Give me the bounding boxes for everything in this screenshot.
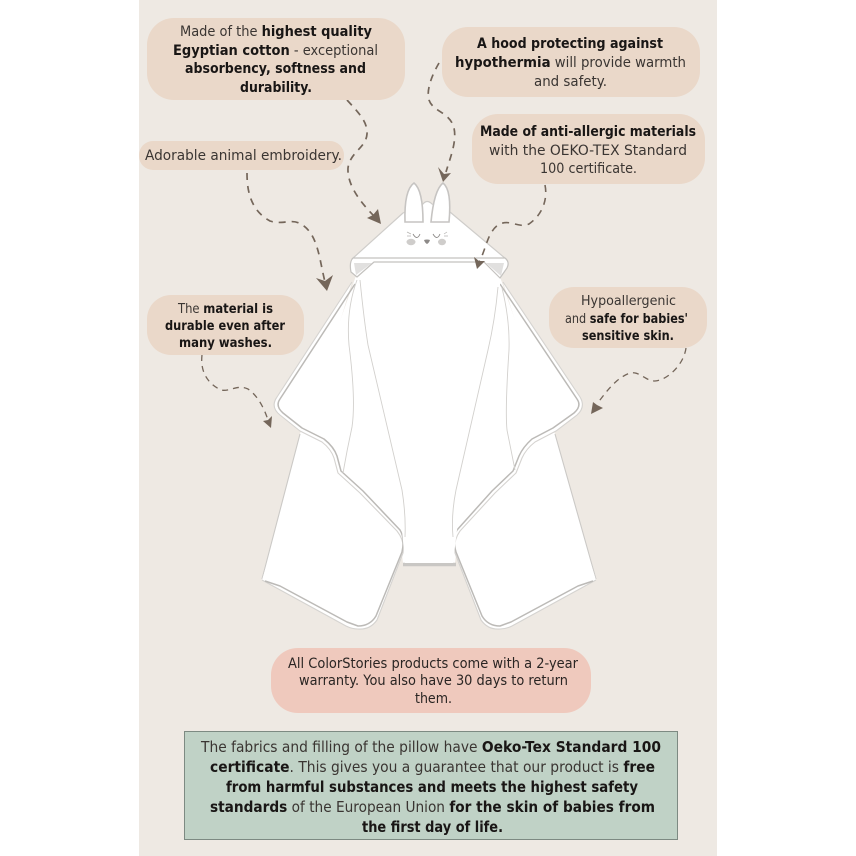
callout: anti-allergic: Made of anti-allergic materials bbox=[480, 124, 696, 140]
hood collar bbox=[350, 258, 508, 278]
callout: anti-allergic: 100 certificate. bbox=[540, 161, 637, 177]
callout: material durability: durable even after bbox=[165, 318, 285, 334]
callout: hood bbox=[442, 27, 700, 97]
callout: warranty bbox=[271, 648, 591, 713]
bunny face bbox=[406, 232, 448, 245]
callout: material durability: The material is bbox=[177, 301, 273, 317]
callout: warranty: them. bbox=[415, 691, 452, 707]
towel back side edges bbox=[262, 434, 596, 579]
callout: Egyptian cotton: Made of the highest quality bbox=[180, 24, 372, 40]
callout: material durability: many washes. bbox=[179, 335, 272, 351]
background panel bbox=[139, 0, 717, 856]
towel fold lines bbox=[343, 280, 515, 537]
callout: Egyptian cotton bbox=[147, 18, 405, 100]
certificate box: The fabrics and filling of the pillow have Oeko-Tex Standard 100 bbox=[200, 738, 661, 756]
callout: hypoallergenic bbox=[549, 287, 707, 348]
hood bbox=[352, 202, 506, 259]
callout: anti-allergic: with the OEKO-TEX Standard bbox=[489, 143, 687, 159]
callout: hypoallergenic: and safe for babies' bbox=[565, 311, 688, 327]
certificate box: standards of the European Union for the skin of babies from bbox=[210, 798, 655, 816]
callout: Egyptian cotton: absorbency, softness and bbox=[185, 61, 366, 77]
callout: warranty: All ColorStories products come with a 2-year bbox=[288, 656, 578, 672]
arrow: cotton to hood bbox=[347, 100, 381, 224]
callout: hood: and safety. bbox=[534, 74, 607, 90]
arrow: hypoallergenic bbox=[591, 348, 686, 414]
callout: Egyptian cotton: Egyptian cotton - exceptional bbox=[173, 43, 378, 59]
callout: hypoallergenic: sensitive skin. bbox=[582, 328, 674, 344]
callout: Egyptian cotton: durability. bbox=[240, 80, 312, 96]
right flap bbox=[455, 282, 596, 629]
certificate box bbox=[184, 732, 678, 840]
callout: embroidery bbox=[139, 141, 344, 170]
arrow: material bbox=[202, 355, 272, 428]
arrow: embroidery bbox=[247, 173, 333, 291]
callout: warranty: warranty. You also have 30 days to return bbox=[299, 673, 568, 689]
hood inner shadows bbox=[354, 263, 504, 276]
left flap bbox=[262, 282, 403, 629]
certificate box: from harmful substances and meets the highest safety bbox=[226, 778, 638, 796]
callout: hood: hypothermia will provide warmth bbox=[455, 55, 686, 71]
arrow: anti-allergic bbox=[474, 185, 546, 269]
callout: hypoallergenic: Hypoallergenic bbox=[581, 293, 676, 309]
arrow: hood protection bbox=[428, 63, 455, 182]
callout: anti-allergic bbox=[472, 114, 705, 184]
centre panel bbox=[358, 262, 500, 563]
towel illustration bbox=[262, 183, 596, 629]
towel back panels bbox=[262, 273, 596, 626]
certificate box: the first day of life. bbox=[362, 818, 503, 836]
callout: embroidery: Adorable animal embroidery. bbox=[145, 148, 342, 164]
callout: hood: A hood protecting against bbox=[477, 36, 663, 52]
certificate box: certificate. This gives you a guarantee that our product is free bbox=[210, 758, 655, 776]
towel bottom hem bbox=[403, 563, 456, 566]
callout: material durability bbox=[147, 295, 304, 355]
left ear bbox=[405, 183, 423, 222]
right ear bbox=[431, 183, 450, 222]
